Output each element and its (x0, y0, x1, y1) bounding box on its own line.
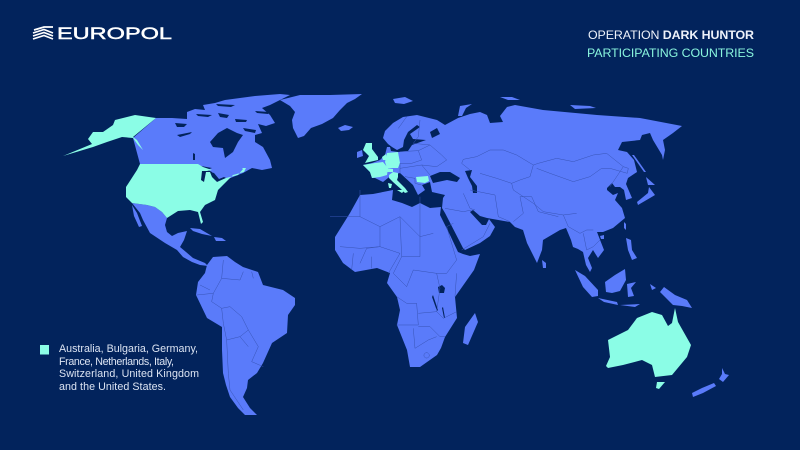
land: Madagascar (463, 313, 478, 345)
legend swatch (40, 345, 49, 354)
land: Arctic islands (458, 104, 472, 116)
country borders: South America (197, 260, 263, 410)
land: Taiwan and Philippines (624, 222, 626, 230)
legend (40, 343, 199, 393)
country borders: Europe (398, 117, 447, 185)
country borders: Asia (462, 150, 628, 250)
legend text: Australia, Bulgaria, Germany, (59, 343, 198, 355)
land masses (132, 94, 729, 415)
country: Switzerland (386, 168, 393, 172)
country: France (363, 162, 388, 178)
legend text (59, 343, 199, 393)
country: Tasmania (656, 382, 665, 389)
land: New Guinea (660, 287, 692, 308)
world map (63, 94, 729, 415)
heading: operation title: OPERATION DARK HUNTOR (588, 28, 754, 42)
land: Canada and Arctic (133, 94, 290, 182)
heading: participating countries: PARTICIPATING COUNTRIES (587, 46, 754, 60)
inland seas and lakes (175, 104, 477, 318)
country: Italy (389, 172, 408, 193)
country borders: Middle East (445, 190, 558, 250)
land: Indonesia (575, 270, 598, 297)
land: Cuba and Caribbean (190, 228, 212, 236)
legend text: Switzerland, United Kingdom (59, 368, 199, 380)
land: Greenland (280, 94, 362, 138)
logo wordmark: EUROPOL (57, 25, 172, 43)
land: Mexico and Central America (132, 203, 208, 266)
legend text: and the United States. (59, 381, 166, 393)
land: Africa (335, 190, 480, 367)
land: South America (196, 256, 295, 415)
country: Germany (385, 152, 400, 168)
icon: Europol emblem (33, 27, 53, 39)
land: Iceland (338, 125, 353, 131)
legend text: France, Netherlands, Italy, (59, 356, 174, 368)
country: Netherlands (382, 154, 387, 160)
land: Ireland (357, 150, 363, 158)
country: Alaska (63, 115, 156, 156)
land: Eurasia (353, 105, 682, 272)
land: Sri Lanka (542, 260, 546, 268)
country: United States (126, 164, 246, 224)
highlighted countries (63, 115, 691, 389)
logo: Europol (33, 25, 172, 43)
land: New Zealand (719, 368, 729, 382)
land: Japan and Sakhalin (637, 187, 655, 205)
country borders: Africa (330, 190, 457, 358)
country: United Kingdom (363, 143, 378, 163)
country: Bulgaria (416, 176, 429, 183)
country: Australia (606, 308, 691, 377)
land: Hainan (600, 235, 604, 239)
